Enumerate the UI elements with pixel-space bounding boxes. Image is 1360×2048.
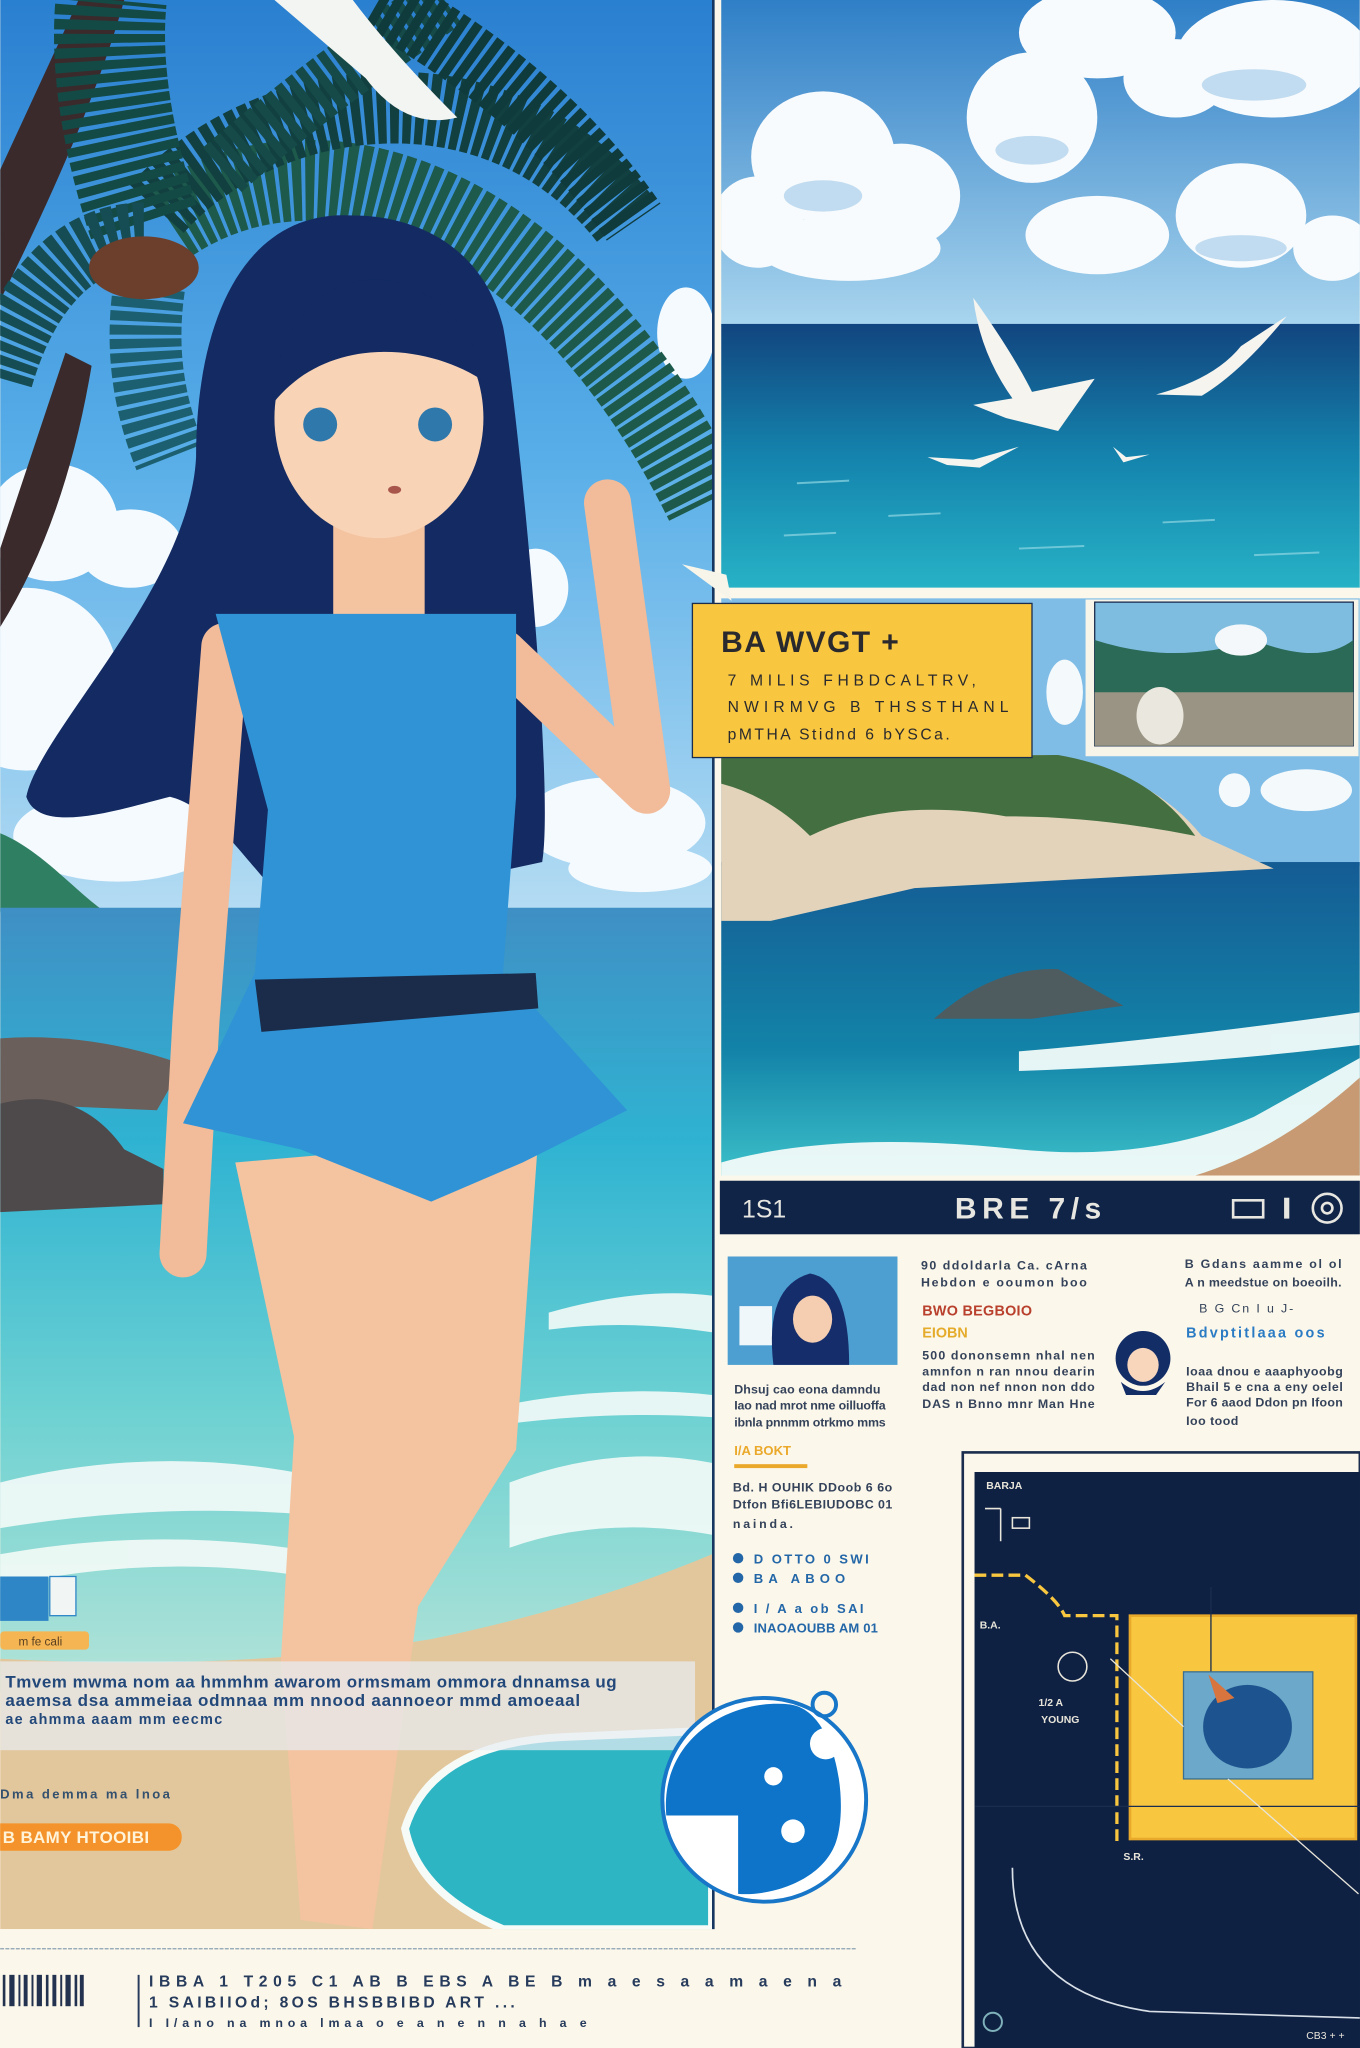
translucent caption strip: aaemsa dsa ammeiaa odmnaa mm nnood aannoeor mmd amoeaal — [5, 1691, 580, 1710]
blue subheading: Bdvptitlaaa oos — [1186, 1325, 1325, 1341]
column 2 paragraph: DAS n Bnno mnr Man Hne — [922, 1397, 1095, 1411]
bullet list: BA ABOO — [754, 1571, 845, 1586]
small orange tag — [0, 1631, 89, 1650]
map route — [975, 1575, 1117, 1842]
distant island — [0, 833, 105, 912]
rock — [934, 969, 1123, 1019]
callout body — [728, 673, 1009, 743]
panel: left beach scene — [0, 0, 715, 1929]
mouth — [388, 486, 401, 494]
text column 1 paragraph — [733, 1481, 893, 1531]
column 3 paragraph: Bhail 5 e cna a eny oelel — [1186, 1380, 1343, 1394]
text column 3: B Gdans aamme ol ol — [1185, 1257, 1342, 1271]
round portrait icon — [1116, 1331, 1170, 1395]
clouds — [1046, 660, 1352, 811]
sky — [0, 0, 712, 914]
text column 1 paragraph: Dtfon Bfi6LEBIUDOBC 01 — [733, 1498, 892, 1512]
panel: small photo inset — [1086, 600, 1359, 756]
orange pill: B BAMY HTOOIBI — [3, 1828, 149, 1847]
yellow map block — [1130, 1616, 1356, 1839]
map markers — [985, 1509, 1087, 1681]
orange subheading: I/A BOKT — [734, 1443, 791, 1458]
bullet list: INAOAOUBB AM 01 — [754, 1621, 878, 1636]
text column 3 — [1185, 1257, 1342, 1290]
simple dress — [183, 614, 627, 1202]
panel divider — [712, 0, 715, 1929]
gulls — [928, 298, 1287, 468]
map labels: YOUNG — [1041, 1715, 1079, 1726]
text column 1: Dhsuj cao eona damndu — [734, 1383, 880, 1397]
orange pill — [0, 1823, 182, 1851]
tide pool — [405, 1731, 712, 1929]
map labels: 1/2 A — [1039, 1698, 1064, 1709]
panel: coastline scene — [721, 598, 1360, 1176]
map labels: B.A. — [980, 1621, 1001, 1632]
footer rule — [0, 1948, 856, 1950]
column 3 paragraph — [1186, 1364, 1343, 1428]
small orange tag: m fe cali — [18, 1636, 62, 1649]
clouds — [712, 0, 1360, 281]
column 2 paragraph: 500 dononsemn nhal nen — [922, 1349, 1095, 1363]
panel: sky and sea with gulls — [712, 0, 1360, 588]
map arc — [1012, 1868, 1360, 2018]
column 3 paragraph: For 6 aaod Ddon pn Ifoon — [1186, 1396, 1343, 1410]
map label: BARJA — [986, 1481, 1023, 1492]
column 3 paragraph: Ioo tood — [1186, 1414, 1238, 1428]
blue map globe — [1203, 1685, 1292, 1768]
callout body: 7 MILIS FHBDCALTRV, — [728, 673, 976, 690]
grid lines — [975, 1587, 1360, 1806]
sea — [0, 908, 712, 1691]
bullet list: D OTTO 0 SWI — [754, 1551, 869, 1566]
header bar: 1S1 — [742, 1196, 786, 1223]
thumbnail portrait — [728, 1256, 897, 1365]
text column 3: A n meedstue on boeoilh. — [1185, 1276, 1342, 1290]
coconut cluster — [89, 236, 199, 299]
header bar: BRE 7/s — [955, 1193, 1101, 1226]
palm trunks — [0, 0, 124, 627]
sand — [1195, 1078, 1360, 1176]
panel: yellow callout — [682, 564, 1032, 758]
column 3 paragraph: Ioaa dnou e aaaphyoobg — [1186, 1364, 1343, 1378]
translucent caption strip — [0, 1661, 695, 1750]
text column 1: Iao nad mrot nme oilluoffa — [734, 1398, 886, 1412]
arms — [183, 647, 225, 1254]
text column 1 — [734, 1383, 886, 1429]
cliff — [721, 755, 1274, 921]
surf — [721, 1012, 1360, 1176]
badges — [0, 1576, 76, 1621]
text column 1 paragraph: Bd. H OUHIK DDoob 6 6o — [733, 1481, 893, 1495]
neck — [333, 526, 425, 614]
bullet list: I / A a ob SAI — [754, 1601, 864, 1616]
yellow subheading: EIOBN — [922, 1325, 968, 1341]
text column 2: Hebdon e ooumon boo — [921, 1276, 1087, 1290]
barcode — [3, 1975, 84, 2006]
text column 1 paragraph: nainda. — [733, 1517, 793, 1531]
header icons — [1233, 1194, 1342, 1223]
bullet list — [733, 1551, 878, 1636]
map labels — [980, 1621, 1144, 1863]
sea — [721, 324, 1360, 588]
small column 3 label: B G Cn I u J- — [1199, 1302, 1293, 1316]
blue circle badge — [662, 1693, 866, 1902]
footer text: I I/ano na mnoa lmaa o e a n e n n a h a e — [149, 2016, 587, 2030]
panel: dark map — [963, 1452, 1360, 2048]
column 2 paragraph — [922, 1349, 1095, 1411]
clouds — [0, 287, 715, 892]
callout heading: BA WVGT + — [721, 626, 899, 659]
sand — [0, 1554, 712, 1929]
header bar — [720, 1181, 1360, 1234]
text column 2 — [921, 1259, 1087, 1290]
cloud shadows — [784, 69, 1306, 261]
legs — [235, 1136, 538, 1929]
corner label: CB3 + + — [1306, 2031, 1345, 2042]
inner map tile — [1184, 1672, 1313, 1779]
orange subheading — [734, 1443, 807, 1468]
rocks — [0, 1037, 183, 1212]
figure: simplified flat shape — [26, 215, 647, 1929]
long hair — [26, 215, 545, 914]
text column 1: ibnla pnnmm otrkmo mms — [734, 1415, 886, 1429]
translucent caption strip: Tmvem mwma nom aa hmmhm awarom ormsmam ommora dnnamsa ug — [5, 1673, 617, 1692]
palm fronds — [0, 0, 705, 503]
footer text: IBBA 1 T205 C1 AB B EBS A BE B m a e s a a m a e n a — [149, 1974, 842, 1991]
face — [274, 352, 484, 538]
translucent caption strip: ae ahmma aaam mm eecmc — [5, 1712, 222, 1728]
small caption: Dma demma ma lnoa — [0, 1787, 171, 1802]
sea — [721, 862, 1360, 1176]
spiral icon — [984, 2013, 1002, 2031]
gull overhead — [274, 0, 457, 120]
footer text — [139, 1974, 842, 2030]
sky — [721, 598, 1360, 866]
sky — [721, 0, 1360, 327]
map leader lines — [1110, 1659, 1359, 1894]
column 2 paragraph: amnfon n ran nnou dearin — [922, 1364, 1095, 1378]
eyes — [303, 408, 337, 441]
column 2 paragraph: dad non nef nnon non ddo — [922, 1380, 1095, 1394]
footer text: 1 SAIBIIOd; 8OS BHSBBIBD ART ... — [149, 1995, 515, 2012]
text column 2: 90 ddoldarla Ca. cArna — [921, 1259, 1087, 1273]
dress sash — [255, 973, 538, 1032]
surf — [0, 1293, 712, 1587]
map labels: S.R. — [1123, 1852, 1144, 1863]
callout body: pMTHA Stidnd 6 bYSCa. — [728, 726, 950, 743]
water sparkles — [784, 481, 1319, 555]
red subheading: BWO BEGBOIO — [922, 1303, 1032, 1319]
callout body: NWIRMVG B THSSTHANL — [728, 699, 1009, 716]
